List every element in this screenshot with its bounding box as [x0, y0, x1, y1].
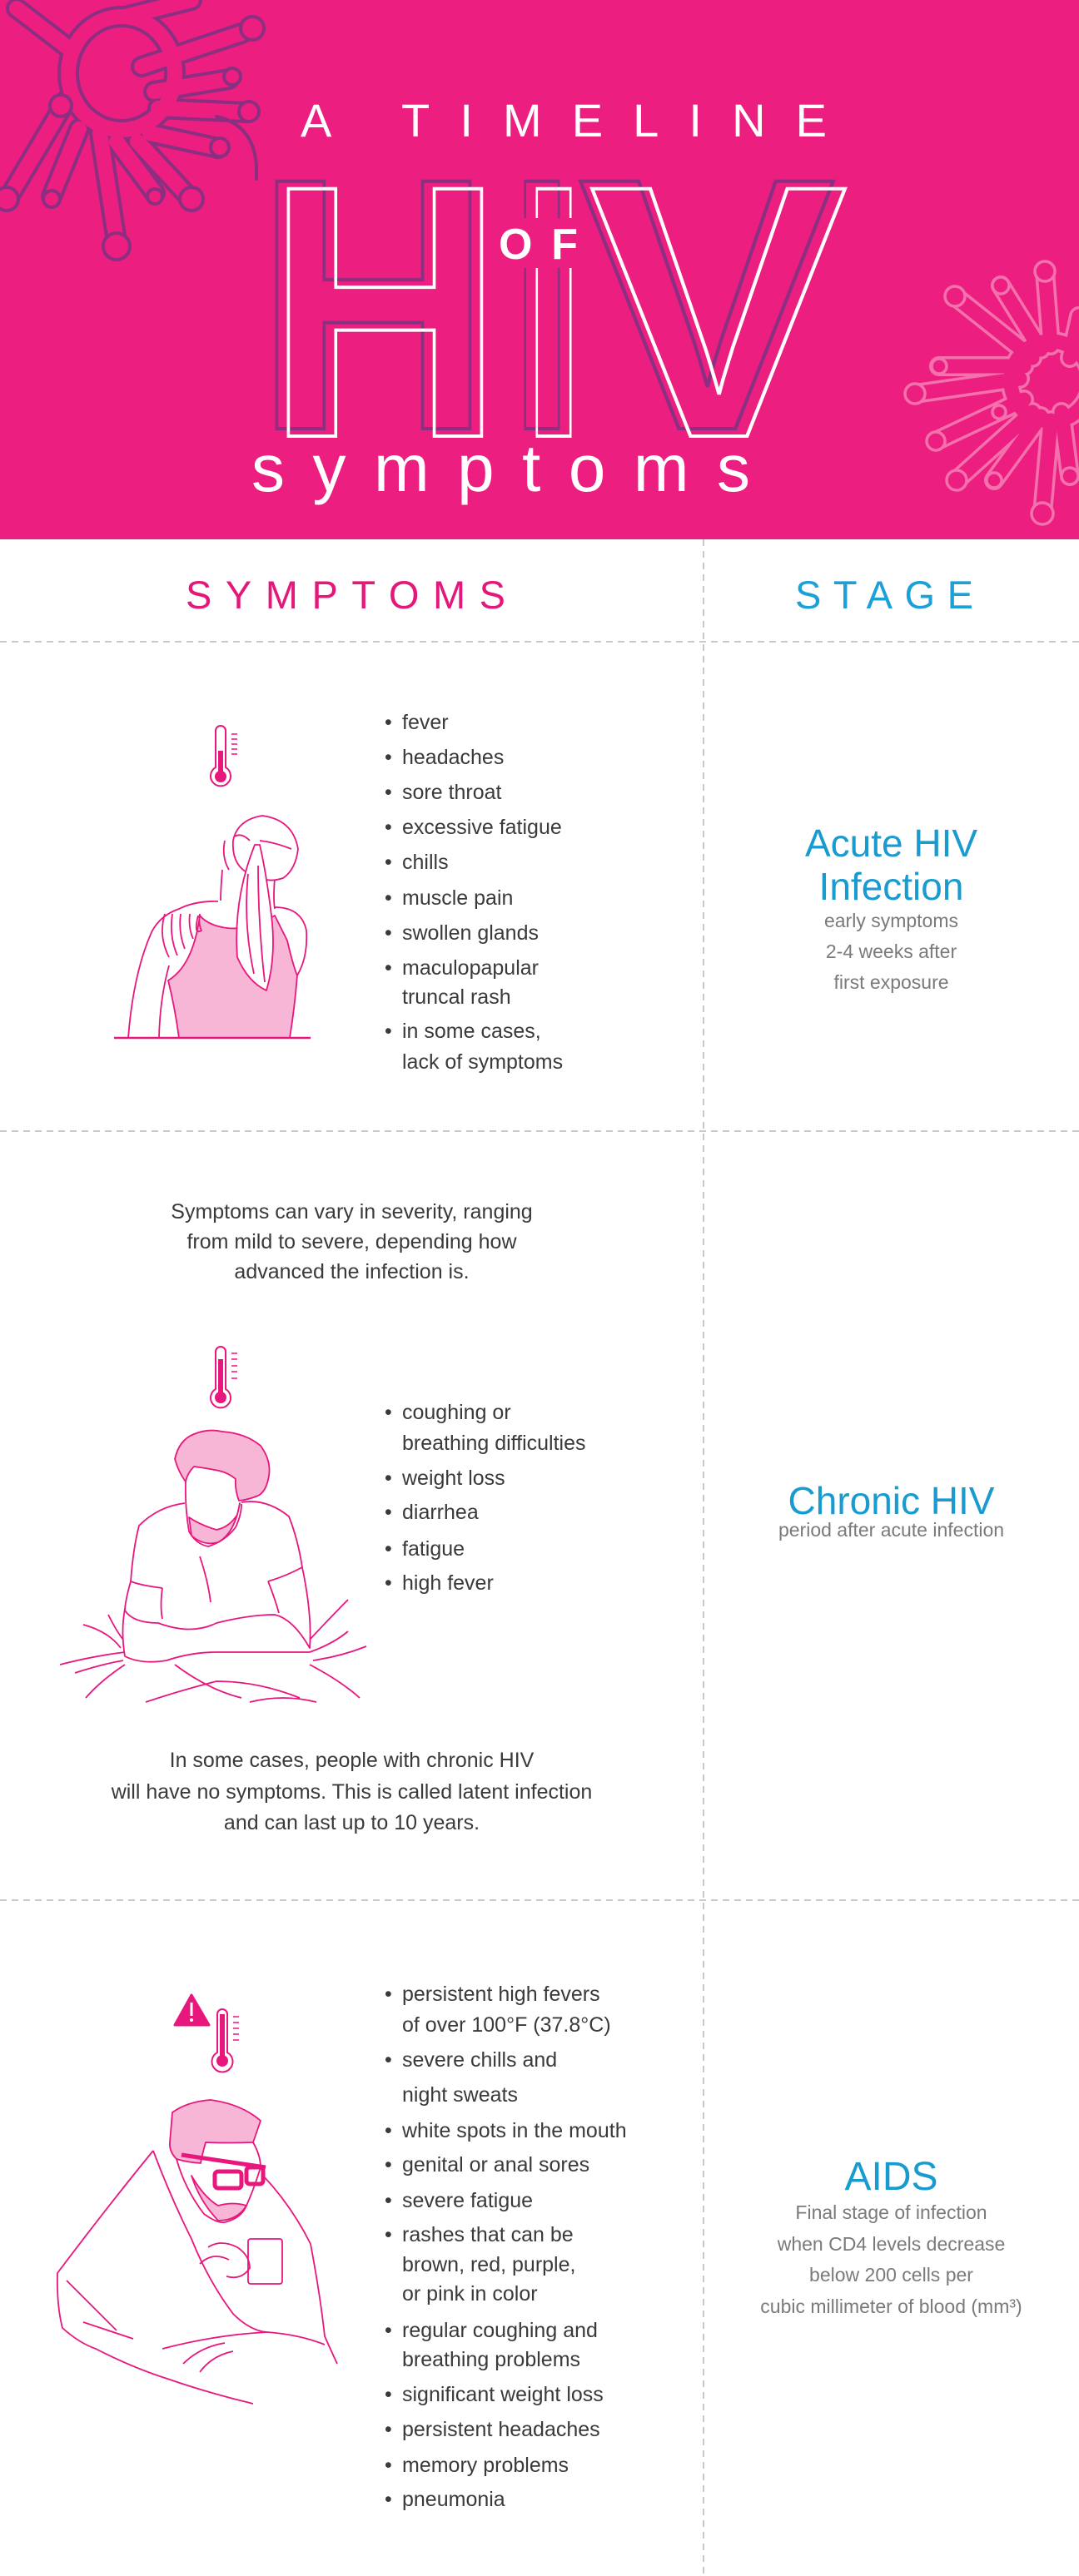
text: • — [385, 2319, 392, 2342]
panel: chronic stage: Chronic HIV — [788, 1479, 994, 1522]
text: weight loss — [402, 1467, 505, 1490]
text: • — [385, 2048, 392, 2072]
text: breathing difficulties — [402, 1432, 586, 1455]
text: • — [385, 921, 392, 945]
text block: severity intro: advanced the infection is. — [234, 1260, 470, 1283]
heading: STAGE: STAGE — [795, 573, 973, 617]
title: HIV outlined letters: V — [578, 103, 838, 505]
text: • — [385, 1020, 392, 1043]
text: brown, red, purple, — [402, 2253, 575, 2276]
text: chills — [402, 851, 449, 874]
illustration: man sitting in bed — [60, 1431, 366, 1702]
text: • — [385, 1571, 392, 1595]
panel: acute stage: Infection — [819, 865, 963, 908]
panel: AIDS stage: AIDS — [844, 2155, 938, 2199]
text: coughing or — [402, 1401, 511, 1424]
panel: acute stage: first exposure — [833, 971, 949, 993]
text: • — [385, 1467, 392, 1490]
text: • — [385, 2418, 392, 2441]
heading: SYMPTOMS: SYMPTOMS — [186, 573, 505, 617]
text: • — [385, 956, 392, 980]
panel: acute stage — [805, 821, 977, 993]
title: OF: OF — [499, 221, 578, 269]
panel: chronic stage — [778, 1479, 1004, 1541]
illustration: man in blanket with mug — [57, 2100, 337, 2404]
title: symptoms: symptoms — [251, 431, 750, 505]
illustration: woman holding shoulder — [114, 816, 311, 1038]
text: of over 100°F (37.8°C) — [402, 2013, 611, 2037]
title: HIV outlined letters: H — [266, 111, 504, 513]
text: • — [385, 816, 392, 839]
header banner — [0, 0, 1079, 539]
panel: acute stage: Acute HIV — [805, 821, 977, 865]
text: pneumonia — [402, 2488, 505, 2511]
text block: severity intro — [171, 1200, 533, 1283]
text: lack of symptoms — [402, 1050, 563, 1074]
text: severe chills and — [402, 2048, 557, 2072]
text: headaches — [402, 746, 504, 769]
text: • — [385, 711, 392, 734]
text: or pink in color — [402, 2282, 538, 2305]
text: diarrhea — [402, 1501, 479, 1524]
text: • — [385, 2153, 392, 2176]
text: • — [385, 2383, 392, 2406]
panel: AIDS stage: Final stage of infection — [795, 2201, 987, 2223]
panel: chronic stage: period after acute infection — [778, 1519, 1004, 1541]
text: genital or anal sores — [402, 2153, 589, 2176]
title: HIV outlined letters: V — [589, 111, 849, 513]
panel: AIDS symptoms list — [385, 1983, 627, 2511]
icon: virus right — [905, 261, 1079, 524]
text: • — [385, 746, 392, 769]
text: persistent headaches — [402, 2418, 600, 2441]
text: • — [385, 1537, 392, 1561]
panel: acute symptoms list — [385, 711, 563, 1074]
text: severe fatigue — [402, 2189, 533, 2212]
panel: AIDS stage: cubic millimeter of blood (mm³) — [760, 2296, 1022, 2317]
icon: virus top-left — [0, 0, 264, 260]
panel: acute stage: early symptoms — [824, 910, 958, 931]
text: muscle pain — [402, 886, 513, 910]
text: • — [385, 886, 392, 910]
text: • — [385, 2189, 392, 2212]
text: • — [385, 2454, 392, 2477]
text: • — [385, 2119, 392, 2142]
icon: thermometer 3 — [211, 2009, 239, 2072]
text: persistent high fevers — [402, 1983, 600, 2006]
text: fever — [402, 711, 449, 734]
text: maculopapular — [402, 956, 539, 980]
text: • — [385, 1401, 392, 1424]
text block: latent infection note — [112, 1749, 592, 1834]
text: excessive fatigue — [402, 816, 562, 839]
text block: severity intro: Symptoms can vary in severity, ranging — [171, 1200, 533, 1223]
text: memory problems — [402, 2454, 569, 2477]
icon: thermometer 2 — [211, 1347, 237, 1407]
title: HIV outlined letters — [255, 103, 849, 513]
text: breathing problems — [402, 2348, 580, 2371]
text: night sweats — [402, 2083, 518, 2107]
text: truncal rash — [402, 985, 511, 1009]
text: in some cases, — [402, 1020, 541, 1043]
text: significant weight loss — [402, 2383, 604, 2406]
text: swollen glands — [402, 921, 539, 945]
text block: latent infection note: In some cases, people with chronic HIV — [170, 1749, 534, 1772]
title: HIV outlined letters: H — [255, 103, 492, 505]
title: HIV outlined letters: I — [510, 103, 574, 505]
panel: chronic symptoms list — [385, 1401, 586, 1595]
text: • — [385, 2223, 392, 2246]
panel: acute stage: 2-4 weeks after — [826, 941, 957, 962]
text: sore throat — [402, 781, 502, 804]
title: HIV outlined letters: I — [521, 111, 586, 513]
panel: AIDS stage: when CD4 levels decrease — [778, 2232, 1005, 2254]
text: regular coughing and — [402, 2319, 598, 2342]
text: • — [385, 851, 392, 874]
text: • — [385, 781, 392, 804]
text block: latent infection note: and can last up to 10 years. — [224, 1811, 480, 1834]
grid lines and illustrations — [0, 539, 1079, 2574]
text block: severity intro: from mild to severe, depending how — [186, 1230, 517, 1253]
text block: latent infection note: will have no symptoms. This is called latent infection — [112, 1779, 592, 1803]
text: white spots in the mouth — [402, 2119, 627, 2142]
panel: AIDS stage: below 200 cells per — [809, 2264, 973, 2286]
text: rashes that can be — [402, 2223, 574, 2246]
text: high fever — [402, 1571, 494, 1595]
text: • — [385, 2488, 392, 2511]
title: A TIMELINE: A TIMELINE — [301, 94, 827, 146]
icon: warning triangle — [175, 1995, 209, 2025]
text: • — [385, 1983, 392, 2006]
panel: AIDS stage — [760, 2155, 1022, 2317]
icon: thermometer 1 — [211, 726, 237, 786]
text: fatigue — [402, 1537, 465, 1561]
text: • — [385, 1501, 392, 1524]
